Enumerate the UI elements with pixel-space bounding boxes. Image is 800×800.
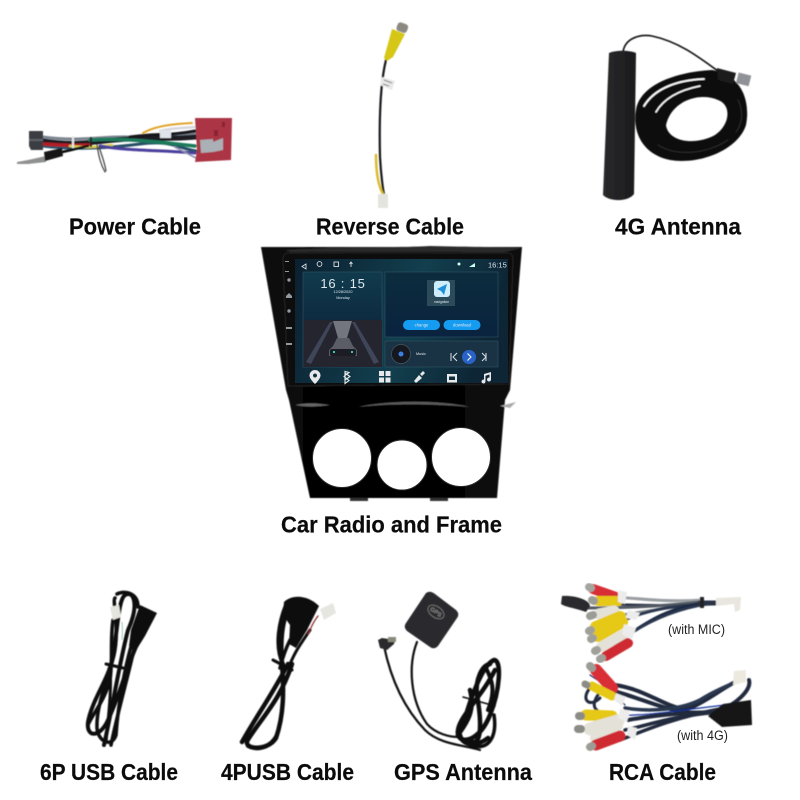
left connector — [29, 131, 43, 150]
gps puck — [405, 592, 458, 648]
label: reverse cable: Reverse Cable — [316, 214, 464, 240]
label: RCA cable: RCA Cable — [609, 759, 716, 785]
vent holes — [312, 428, 372, 488]
label: GPS antenna: GPS Antenna — [394, 759, 532, 785]
antenna plug — [17, 156, 46, 164]
icon: navigation app — [434, 281, 450, 297]
item: RCA cable with 4G — [578, 666, 752, 747]
gps plug — [378, 638, 395, 650]
label: power cable: Power Cable — [69, 214, 201, 240]
icon: location pin — [310, 370, 320, 384]
coiled cable — [635, 70, 747, 161]
item: 4G antenna — [603, 36, 751, 200]
4P connector — [733, 670, 746, 685]
note: with MIC: (with MIC) — [668, 622, 725, 637]
wire tag — [380, 77, 395, 90]
panel: navigation: change — [415, 322, 429, 328]
panel: navigation: navigation — [434, 300, 449, 304]
panel: clock — [303, 272, 382, 367]
antenna body — [603, 51, 636, 200]
icon: radio — [447, 374, 457, 382]
item: GPS antenna — [378, 592, 499, 750]
panel: navigation: download — [453, 322, 472, 328]
item: power cable — [17, 118, 232, 172]
panel: clock: Monday — [336, 296, 350, 300]
icon: brush — [414, 371, 425, 383]
icon: bluetooth — [344, 372, 350, 384]
gps text: GPS — [429, 607, 442, 619]
side buttons — [285, 261, 292, 345]
label: 4PUSB cable: 4PUSB Cable — [221, 759, 354, 785]
rca plugs — [589, 587, 628, 659]
panel: music: Music — [416, 352, 426, 356]
label: car radio and frame: Car Radio and Frame — [281, 512, 502, 538]
screen — [295, 259, 508, 383]
head unit edge — [283, 253, 513, 386]
tags and connector — [618, 590, 640, 640]
audio jack — [561, 596, 590, 612]
icon: music note — [482, 372, 491, 384]
note: with 4G: (with 4G) — [677, 728, 728, 743]
label: 6P USB cable: 6P USB Cable — [40, 759, 178, 785]
dock icons — [310, 370, 491, 384]
car road scene — [304, 320, 382, 367]
white connector — [378, 194, 388, 208]
tags — [614, 693, 637, 740]
red connector — [195, 118, 232, 162]
item: car radio and frame — [261, 246, 522, 501]
panel: clock: 12/28/2020 — [333, 290, 353, 294]
icon: apps grid — [379, 371, 390, 382]
cable ties and label — [72, 136, 74, 148]
item: reverse cable — [376, 22, 409, 208]
status bar: 16:15 — [488, 260, 507, 270]
coiled cable — [384, 642, 499, 750]
car — [329, 338, 357, 356]
antenna plug — [717, 68, 736, 84]
usb plug — [129, 605, 157, 652]
item: RCA cable with MIC — [561, 587, 741, 659]
wire bundle — [43, 123, 196, 172]
label: 4G antenna: 4G Antenna — [615, 214, 741, 240]
rca plug — [384, 29, 405, 61]
status bar — [302, 260, 507, 270]
button: change — [403, 320, 440, 330]
rca plugs — [578, 666, 620, 747]
panel: navigation — [385, 272, 498, 337]
white connector — [320, 603, 336, 620]
item: 4P USB cable — [242, 597, 336, 748]
button: download — [444, 320, 480, 330]
frame — [261, 246, 522, 501]
item: 6P USB cable — [88, 592, 157, 745]
white connector — [110, 605, 121, 620]
panel: music — [385, 341, 498, 367]
USB socket — [708, 700, 752, 727]
usb plug — [283, 597, 319, 648]
panel: clock: 16 : 15 — [320, 276, 366, 291]
